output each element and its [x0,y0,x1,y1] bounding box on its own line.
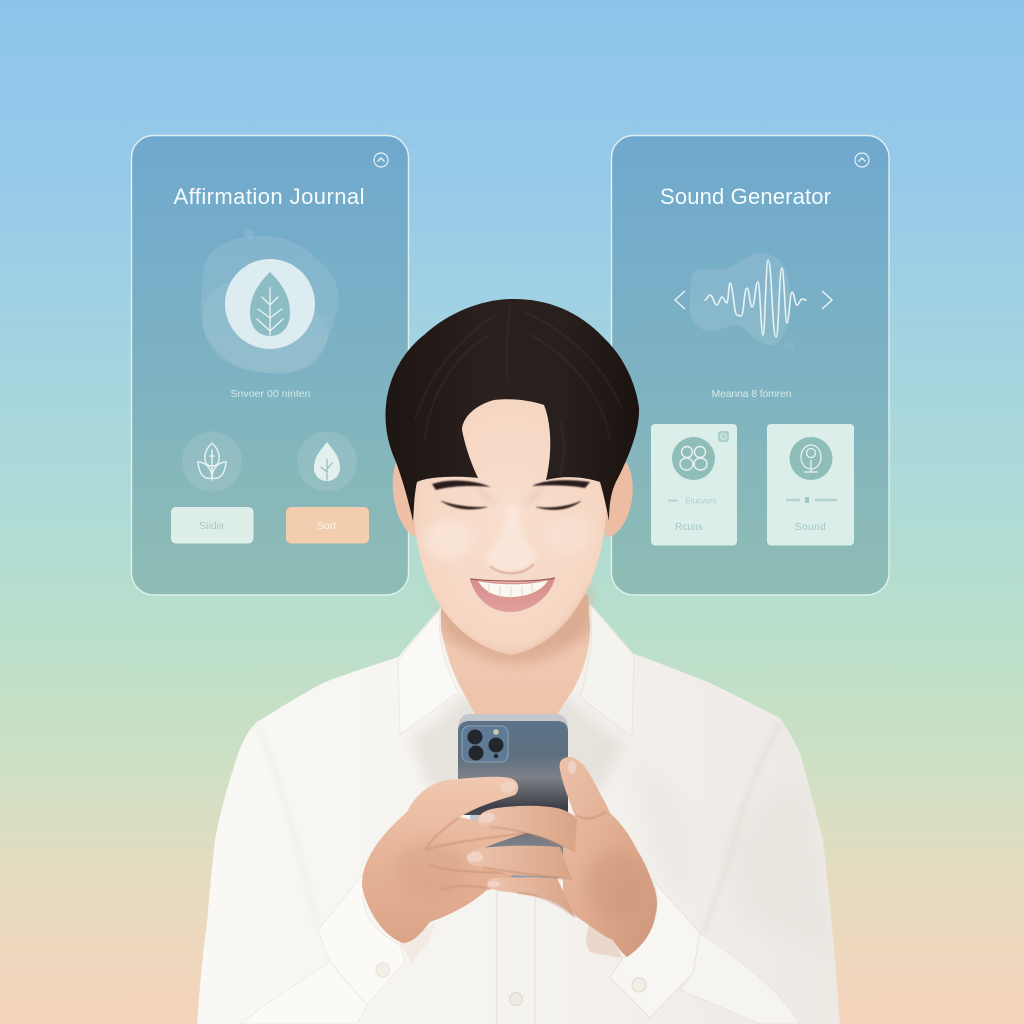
caption text: Snvoer 00 ninten [230,388,311,400]
icon: panel menu button [374,153,388,167]
left eye [441,501,487,509]
caption text: Meanna 8 fomren [712,388,792,400]
left thumbnail [499,780,517,794]
finger one [478,806,577,852]
phone back [458,721,568,878]
phone frame [458,714,568,876]
camera module [462,726,508,762]
card: sound: Sound [795,522,826,533]
hands [240,757,800,1024]
left hand [362,777,527,943]
face [412,385,609,655]
right nails [467,760,576,887]
inner cuff right [586,918,622,958]
icon: water drop [297,432,357,492]
left eyebrow [432,480,491,490]
mouth [470,578,555,612]
hair [385,299,639,521]
inner cuff left [400,923,435,963]
collar right [580,604,634,737]
right sleeve fold [680,933,800,1024]
heading: Sound Generator: Sound Generator [660,184,831,209]
cheek and nose shading [424,480,596,657]
right eyebrow [532,480,590,488]
right hand palm and thumb [559,757,657,957]
left sleeve fold [240,962,367,1024]
left ear [393,463,424,537]
shirt button [510,992,522,1006]
person holding phone [197,299,840,1024]
sound wave line [705,260,806,337]
collar left [398,608,458,735]
left cuff [318,862,405,1005]
phone [458,714,568,878]
card: rituals: Etucvoro [685,496,717,506]
card: sound [767,424,854,546]
arrow: previous [675,291,685,309]
button: secondary [171,507,254,544]
right hand [467,757,657,957]
finger three [487,877,575,917]
right eye [536,501,581,510]
icon: leaf in circle with soft blobs [201,229,339,374]
card: rituals [651,424,737,546]
button: sort: Sort [317,520,336,532]
panel: sound generator [612,136,889,595]
right ear [600,463,633,537]
shirt [197,604,840,1024]
icon: panel menu button [855,153,869,167]
left hand creases [425,818,525,890]
shirt placket [497,890,535,1024]
arrow: next [822,291,832,309]
waveform with arrows [675,253,832,351]
neck [441,595,590,716]
button: sort [286,507,369,544]
card: rituals: Rcuiıs [675,522,703,533]
shirt soft shading [257,690,830,950]
neck shadow under chin [446,605,588,664]
hair highlights [415,305,622,475]
finger two [467,846,572,880]
right hand creases [483,812,605,917]
right cuff [610,877,700,1018]
heading: Affirmation Journal: Affirmation Journal [174,184,364,209]
right cuff button [632,978,646,992]
button: secondary: Siidiir [199,520,225,532]
panel: affirmation journal [132,136,408,595]
left cuff button [376,963,390,977]
icon: sprout [182,432,242,492]
